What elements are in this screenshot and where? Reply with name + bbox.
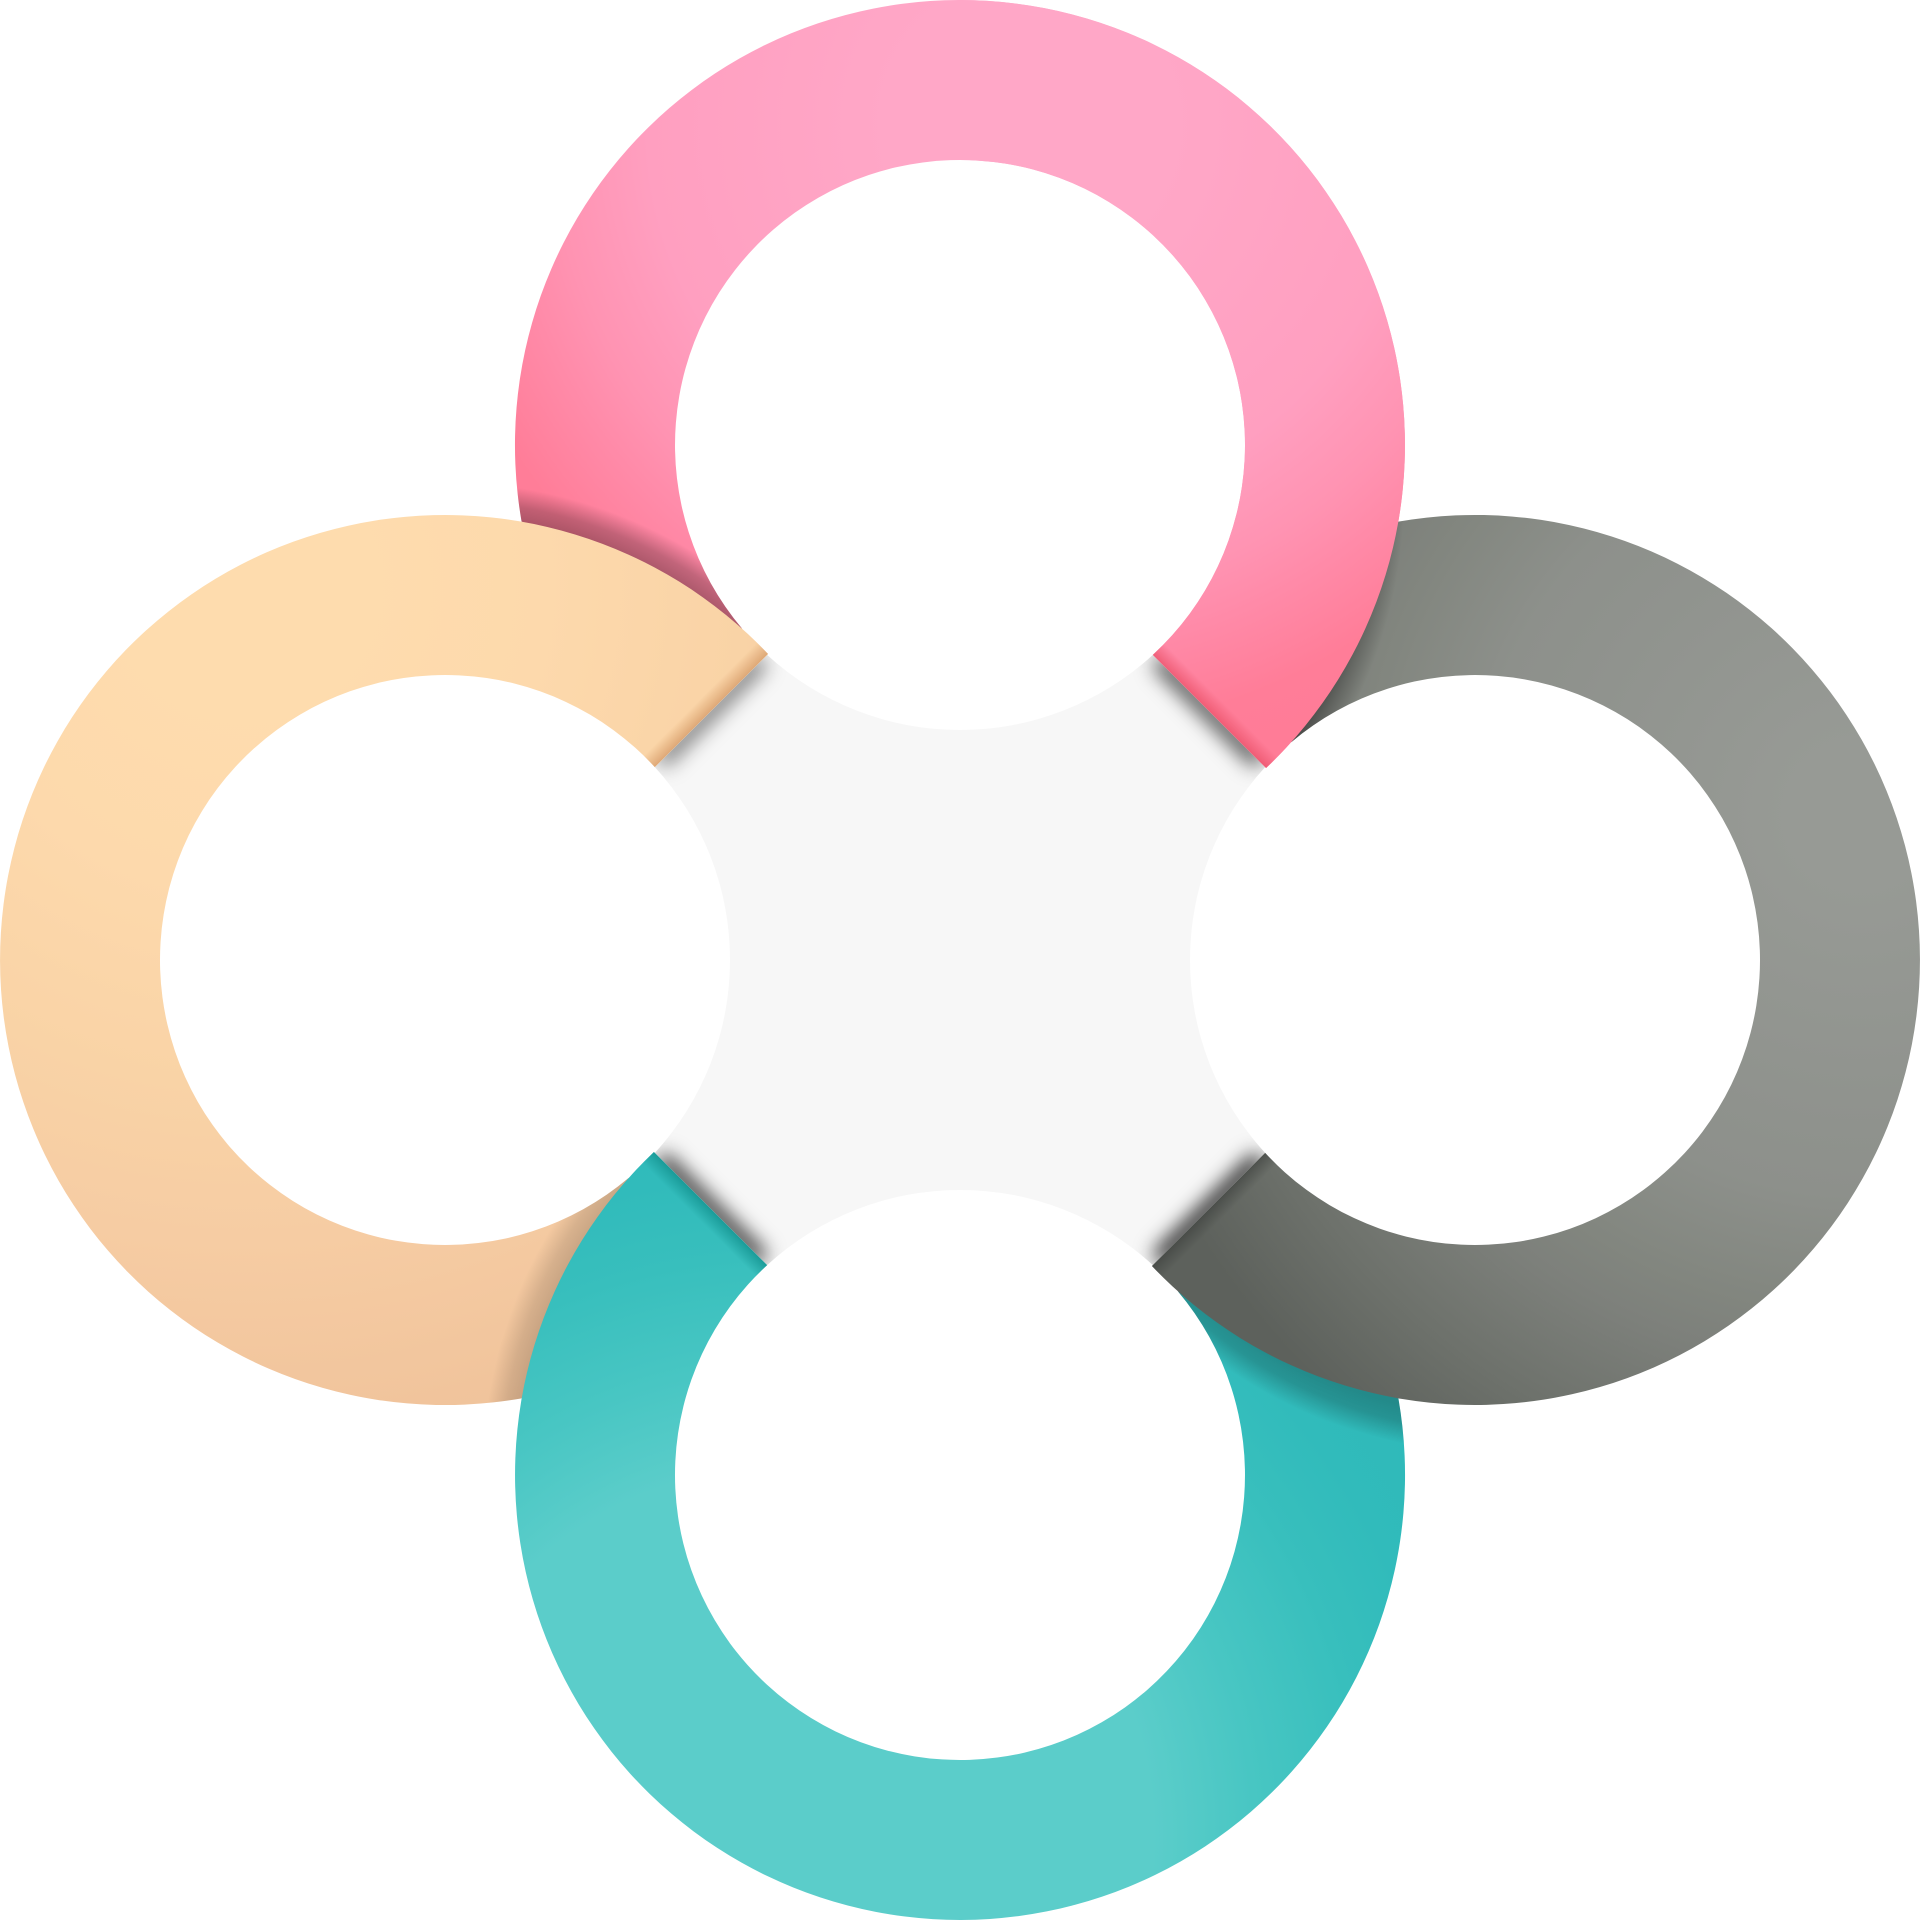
- ring: top pink: [515, 0, 1405, 768]
- ring: top pink section crossing over grey ring: [963, 0, 1405, 768]
- ring: left peach: [0, 515, 768, 1405]
- panel: centre light grey shape: [655, 655, 1265, 1265]
- ring: right grey: [1152, 515, 1920, 1405]
- ring: bottom teal: [515, 1152, 1405, 1920]
